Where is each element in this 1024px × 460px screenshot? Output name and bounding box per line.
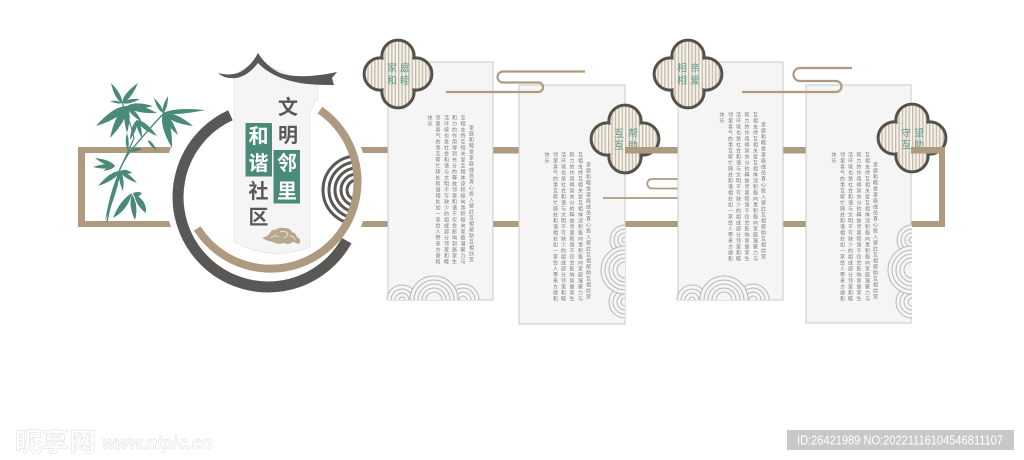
roof — [218, 53, 337, 85]
heading: 文明邻里: 邻 — [277, 152, 297, 175]
heading: 和谐社区: 区 — [248, 207, 268, 229]
card 1 body text: 活环境也是社会和谐与文明不可缺少的组成部分邻里和睦 — [443, 114, 449, 265]
watermark logo — [15, 427, 212, 457]
scroll body — [234, 60, 318, 253]
watermark logo: 昵享网 — [15, 427, 96, 457]
card 1 body text: 邻里喜气的事互帮忙随处和谐相处如一家给人带来方便和 — [434, 114, 440, 265]
panel: card 4 — [806, 85, 912, 323]
card 1 body text — [426, 114, 474, 265]
panel: card 2 — [519, 85, 625, 324]
icon: clover 互帮互助: 互 — [614, 140, 624, 152]
icon: clover 守望互助: 望 — [914, 126, 924, 140]
card 4 body text: 互相支持互相关爱互相体谅积极向事积极向家庭凝聚力与 — [864, 152, 870, 302]
heading: 文明邻里: 明 — [278, 125, 298, 147]
card 4 body text: 和力的作用得到充分的释放邻里和谐不仅会影响到居家生 — [856, 151, 862, 302]
card 4 background — [806, 85, 911, 323]
card 4 body text: 家庭和睦是家庭成员真心投入彼此互相帮助互相欣赏 — [872, 161, 878, 300]
arrow: cloud line 1 — [446, 72, 585, 92]
card 3 body text: 邻里喜气的事互帮忙随处和谐相处如一家给人带来方便和 — [727, 111, 733, 262]
icon: clover 相亲相爱: 爱 — [690, 74, 700, 87]
card 4 body text: 活环境也是社会和谐与文明不可缺少的组成部分邻里和睦 — [847, 151, 853, 302]
card 2 background — [519, 85, 625, 324]
card 2 body text: 互相支持互相关爱互相体谅积极向事积极向家庭凝聚力与 — [577, 152, 583, 302]
card 3 body text: 活环境也是社会和谐与文明不可缺少的组成部分邻里和睦 — [735, 111, 741, 262]
icon: clover 相亲相爱: 亲 — [690, 62, 700, 74]
horizontal frame bars — [78, 147, 945, 227]
icon: clover 守望互助: 守 — [901, 126, 911, 140]
card 3 body text: 互相支持互相关爱互相体谅积极向事积极向家庭凝聚力与 — [752, 112, 758, 262]
arrow: cloud line 2 — [603, 179, 692, 198]
icon: clover 守望互助: 助 — [914, 138, 924, 152]
watermark logo: www.nipic.cn — [102, 433, 212, 453]
panel: card 1 — [387, 62, 493, 300]
heading: 和谐社区: 社 — [248, 180, 268, 203]
tan ring — [197, 110, 358, 269]
image id bar — [787, 430, 1014, 450]
card 2 cloud pattern — [601, 225, 625, 318]
icon: clover 守望互助 — [878, 104, 946, 172]
panel: card 3 — [677, 62, 783, 300]
heading: 和谐社区: 谐 — [248, 152, 268, 175]
heading: 文明邻里 — [277, 95, 298, 203]
icon: clover 互帮互助 — [591, 105, 659, 173]
icon: clover 家庭和睦: 家 — [387, 62, 397, 74]
icon: clover 家庭和睦: 和 — [387, 75, 397, 87]
dark ring — [178, 115, 347, 287]
icon: bamboo — [93, 83, 205, 222]
card 1 body text: 快乐 — [426, 114, 432, 127]
heading: 文明邻里: 文 — [278, 95, 298, 119]
green tile: 邻里 — [274, 150, 300, 204]
concentric half circles — [322, 155, 354, 222]
card 2 body text: 活环境也是社会和谐与文明不可缺少的组成部分邻里和睦 — [560, 151, 566, 302]
card 4 body text: 邻里喜气的事互帮忙随处和谐相处如一家给人带来方便和 — [839, 151, 845, 302]
card 1 background — [388, 62, 493, 300]
card 3 body text — [718, 111, 766, 262]
card 3 body text: 家庭和睦是家庭成员真心投入彼此互相帮助互相欣赏 — [760, 121, 766, 260]
card 1 cloud pattern — [387, 276, 479, 300]
image id bar: ID:26421989 NO:20221116104546811107 — [797, 434, 1003, 448]
icon: clover 家庭和睦 — [364, 40, 432, 108]
card 2 body text: 快乐 — [544, 151, 550, 164]
scroll banner — [218, 53, 337, 253]
icon: auspicious cloud — [262, 228, 300, 244]
icon: clover 互帮互助: 帮 — [628, 128, 638, 140]
green tile: 和谐 — [246, 123, 272, 176]
card 1 body text: 家庭和睦是家庭成员真心投入彼此互相帮助互相欣赏 — [468, 124, 474, 263]
icon: clover 相亲相爱: 相 — [677, 74, 687, 87]
icon: clover 相亲相爱 — [654, 40, 722, 108]
card 4 body text — [830, 151, 878, 302]
card 3 body text: 和力的作用得到充分的释放邻里和谐不仅会影响到居家生 — [744, 111, 750, 262]
icon: clover 互帮互助: 互 — [614, 128, 624, 140]
card 3 background — [678, 62, 783, 300]
right frame corner — [911, 147, 945, 227]
card 2 body text — [544, 151, 591, 302]
icon: clover 相亲相爱: 相 — [677, 62, 687, 74]
card 2 body text: 邻里喜气的事互帮忙随处和谐相处如一家给人带来方便和 — [552, 151, 558, 302]
icon: clover 守望互助: 互 — [901, 140, 911, 152]
icon: clover 家庭和睦: 睦 — [400, 74, 410, 87]
heading: 文明邻里: 里 — [277, 181, 297, 203]
connector bar over clover 2 — [625, 147, 678, 154]
card 2 body text: 和力的作用得到充分的释放邻里和谐不仅会影响到居家生 — [568, 151, 574, 302]
card 1 body text: 互相支持互相关爱互相体谅积极向事积极向家庭凝聚力与 — [460, 115, 466, 265]
heading: 和谐社区: 和 — [248, 125, 268, 148]
card 4 cloud pattern — [888, 225, 912, 318]
arrow: cloud line 3 — [742, 68, 852, 92]
heading: 和谐社区 — [248, 125, 268, 229]
card 3 body text: 快乐 — [718, 111, 724, 124]
card 1 body text: 和力的作用得到充分的释放邻里和谐不仅会影响到居家生 — [451, 114, 457, 265]
icon: clover 家庭和睦: 庭 — [400, 62, 410, 74]
card 2 body text: 家庭和睦是家庭成员真心投入彼此互相帮助互相欣赏 — [585, 161, 591, 300]
card 4 body text: 快乐 — [830, 151, 836, 164]
card 3 cloud pattern — [677, 276, 769, 300]
icon: clover 互帮互助: 助 — [628, 139, 638, 152]
